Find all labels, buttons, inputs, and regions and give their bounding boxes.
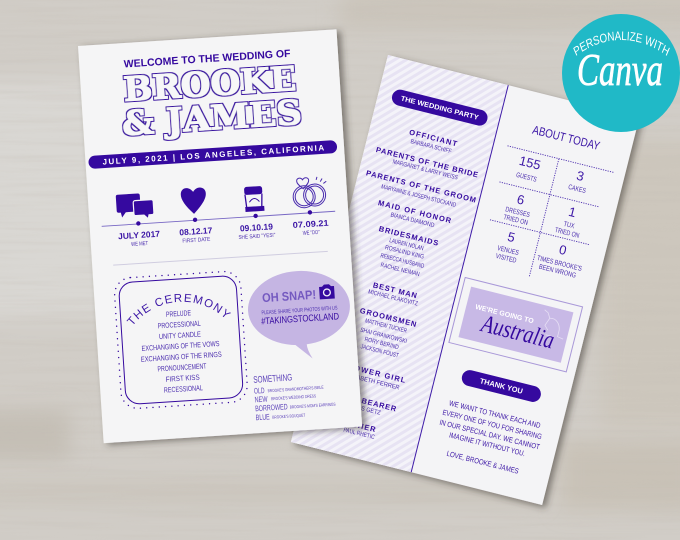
something old new borrowed blue list: SOMETHING: [253, 372, 293, 386]
callout: we're going to Australia: WE'RE GOING TO: [474, 304, 535, 325]
wedding party list: MAID OF HONOR: [377, 198, 453, 225]
card sheet: [291, 55, 639, 505]
stats grid: 5: [506, 229, 517, 245]
something old new borrowed blue list: BROOKE'S BOUQUET: [272, 413, 306, 420]
stats grid: 1: [567, 204, 578, 220]
timeline label: first date: FIRST DATE: [182, 237, 211, 245]
ceremony order list: RECESSIONAL: [164, 383, 203, 395]
ceremony order list: PRELUDE: [166, 308, 191, 319]
wedding party list: PARENTS OF THE GROOM: [365, 168, 477, 205]
wedding party list: PAUL RHETIC: [343, 427, 376, 441]
pill: the wedding party: THE WEDDING PARTY: [400, 96, 479, 122]
ceremony order list: [138, 306, 224, 396]
wedding party list: GROOMSMEN: [359, 306, 417, 329]
wedding party list: BRIDESMAIDS: [378, 224, 439, 248]
wedding party list: BARBARA SCHIFF: [410, 138, 452, 155]
icon: ring box: [244, 186, 264, 212]
ceremony order list: FIRST KISS: [165, 373, 200, 384]
wedding party list: PARENTS OF THE BRIDE: [375, 145, 479, 179]
timeline label: July 2017: JULY 2017: [118, 229, 161, 241]
timeline: [99, 176, 337, 250]
stats grid: [478, 146, 614, 291]
something old new borrowed blue list: [253, 370, 337, 422]
timeline label: we do: WE "DO": [303, 230, 320, 237]
timeline label: first date: [179, 225, 213, 245]
thank you message: IMAGINE IT WITHOUT YOU.: [448, 430, 526, 458]
thank you message: [432, 397, 546, 479]
title: couple names: [119, 59, 303, 144]
icon: chat bubbles: [116, 192, 154, 221]
something old new borrowed blue list: BORROWED: [255, 402, 288, 413]
back card: program reverse: [291, 55, 639, 505]
speech bubble: oh snap: [246, 268, 353, 362]
pill: the wedding party: [390, 88, 489, 127]
wedding party list: RACHEL NEIMAN: [380, 262, 420, 278]
icon: wedding rings: [292, 176, 328, 208]
ceremony order list: UNITY CANDLE: [159, 329, 201, 341]
wedding party list: USHER: [345, 418, 377, 434]
callout: we're going to Australia: [449, 277, 583, 372]
timeline label: she said yes: SHE SAID "YES!": [238, 233, 276, 241]
striped wedding party panel: [291, 55, 508, 472]
something old new borrowed blue list: BLUE: [255, 412, 270, 422]
wedding party list: MARGARET & LARRY WEISS: [392, 158, 458, 182]
wedding party list: SILAS GETZ: [349, 402, 382, 417]
stats grid: 155: [518, 153, 542, 173]
heading: the ceremony arc: THE CEREMONY: [126, 294, 231, 324]
icon: heart: [180, 187, 207, 215]
heading: welcome: WELCOME TO THE WEDDING OF: [123, 49, 291, 70]
wedding party list: ELIZABETH FERRER: [344, 371, 401, 392]
stats grid: 3: [575, 168, 586, 184]
stats grid: VENUES: [496, 245, 520, 257]
something old new borrowed blue list: OLD: [254, 386, 265, 396]
timeline label: July 2017: WE MET: [131, 241, 149, 248]
ceremony order list: PROCESSIONAL: [157, 319, 201, 330]
stats grid: TUX: [563, 221, 575, 230]
timeline label: she said yes: 09.10.19: [240, 221, 273, 233]
stats grid: TRIED ON: [554, 227, 580, 240]
title: couple names: & JAMES: [121, 93, 303, 144]
stats grid: CAKES: [567, 184, 587, 195]
thank you message: EVERY ONE OF YOU FOR SHARING: [442, 408, 543, 441]
panel divider: [411, 85, 508, 472]
thank you message: IN OUR SPECIAL DAY. WE CANNOT: [439, 418, 541, 452]
title: couple names: BROOKE: [122, 59, 297, 110]
heading: about today: ABOUT TODAY: [531, 123, 601, 153]
badge: personalize with Canva: PERSONALIZE WITH: [573, 32, 670, 56]
wedding party list: SHAI GRANKOWSKI: [359, 327, 408, 345]
panel: the ceremony: [114, 270, 248, 409]
something old new borrowed blue list: BROOKE'S WEDDING DRESS: [271, 393, 316, 401]
timeline label: first date: 08.12.17: [179, 225, 213, 237]
icon: kangaroo: [539, 310, 569, 339]
wedding party list: REBECCA HUSBAND: [380, 252, 425, 270]
wedding party list: ROSALIND KING: [384, 244, 425, 261]
stats grid: DRESSES: [505, 206, 531, 219]
callout: we're going to Australia: Australia: [477, 310, 557, 355]
something old new borrowed blue list: NEW: [254, 394, 268, 404]
wedding party list: FLOWER GIRL: [342, 361, 407, 385]
badge: personalize with Canva: [562, 14, 680, 132]
stats grid: BEEN WRONG: [538, 264, 577, 280]
stats grid: 6: [515, 191, 526, 208]
pill: thank you: THANK YOU: [479, 376, 524, 396]
wedding party list: RING BEARER: [337, 390, 398, 414]
thank you message: LOVE, BROOKE & JAMES: [446, 449, 520, 476]
front card: program cover: [78, 26, 371, 449]
timeline label: she said yes: [238, 221, 276, 241]
stats grid: GUESTS: [515, 172, 538, 184]
timeline label: July 2017: [118, 229, 161, 249]
something old new borrowed blue list: BROOKE'S GRANDMOTHER'S BIBLE: [267, 385, 324, 393]
date and location banner: JULY 9, 2021 | LOS ANGELES, CALIFORNIA: [102, 143, 325, 167]
wedding party list: BEST MAN: [372, 280, 418, 300]
wedding party list: MATTHEW TUCKER: [364, 318, 408, 335]
timeline label: we do: [292, 218, 330, 237]
wedding party list: MARYANNE & JOSEPH STOCKAND: [380, 183, 457, 209]
wedding party list: RORY BERIND: [364, 336, 400, 351]
stats grid: VISITED: [495, 253, 517, 265]
speech bubble: oh snap: PLEASE SHARE YOUR PHOTOS WITH US: [261, 305, 338, 316]
ceremony order list: EXCHANGING OF THE RINGS: [141, 350, 222, 364]
stats grid: TIMES BROOKE'S: [536, 255, 583, 273]
wedding party list: MICHAEL PLAKOVITZ: [367, 288, 419, 308]
wedding party list: LAUREN NOLAN: [389, 237, 424, 252]
wedding party list: BIANCA DIAMOND: [390, 212, 436, 229]
wedding party list: [303, 120, 489, 451]
stats grid: TRIED ON: [503, 214, 529, 227]
speech bubble: oh snap: OH SNAP!: [262, 288, 316, 305]
wedding party list: JACKSON FOUST: [360, 343, 400, 360]
card sheet: [78, 29, 362, 443]
ceremony order list: EXCHANGING OF THE VOWS: [141, 339, 220, 353]
stats grid: 0: [557, 242, 568, 258]
something old new borrowed blue list: BROOKE'S MOM'S EARRINGS: [290, 402, 336, 410]
speech bubble: oh snap: #TAKINGSTOCKLAND: [261, 311, 339, 327]
ceremony order list: PRONOUNCEMENT: [157, 361, 207, 374]
icon: camera: [319, 284, 335, 299]
wedding party list: OFFICIANT: [408, 128, 458, 148]
timeline label: we do: 07.09.21: [292, 218, 329, 230]
thank you message: WE WANT TO THANK EACH AND: [448, 398, 542, 430]
pill: thank you: [460, 368, 543, 404]
